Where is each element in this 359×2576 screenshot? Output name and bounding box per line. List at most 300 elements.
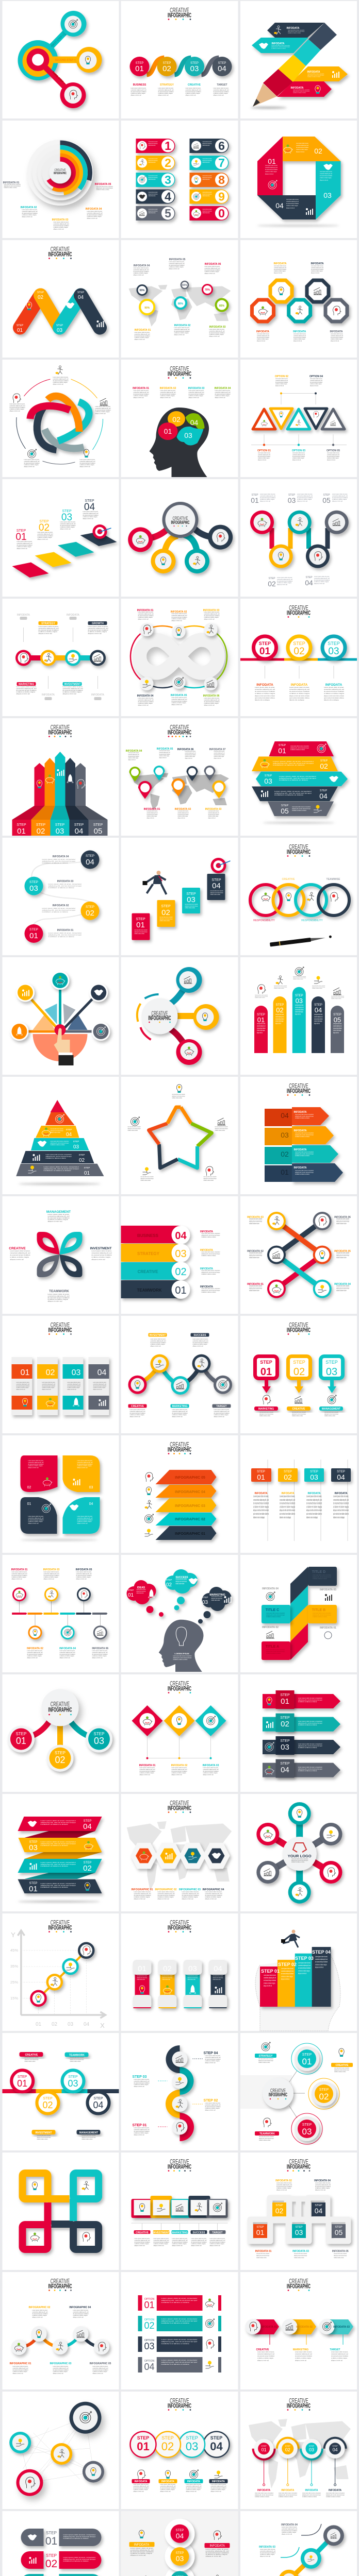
step numbers: STEP xyxy=(46,2553,57,2558)
pins xyxy=(255,1356,342,1393)
section text: 03 xyxy=(323,191,332,199)
title boxes xyxy=(262,1567,337,1660)
ring text: 02 xyxy=(293,646,305,657)
step numbers: STEP xyxy=(86,905,94,909)
ribbon numbers: 01 xyxy=(136,921,145,929)
bands xyxy=(252,741,348,816)
panel: square pins xyxy=(240,1316,357,1433)
pin text: INFODATA 04 xyxy=(126,750,142,753)
info blocks: INFODATA 03 xyxy=(188,387,205,390)
circles and numbers: 5 xyxy=(165,207,171,220)
ring numbers: 02 xyxy=(161,2440,174,2453)
band text: STEP xyxy=(84,1820,91,1823)
bar text: STEP 01 xyxy=(261,1969,280,1974)
nodes xyxy=(256,2525,344,2576)
title xyxy=(48,724,72,737)
step numbers: STEP xyxy=(86,854,94,858)
dotted map xyxy=(129,285,231,327)
ribbon numbers xyxy=(134,878,223,935)
bar text: STEP 02 xyxy=(278,1962,297,1967)
icon nodes xyxy=(60,11,102,108)
axes: Y xyxy=(11,1931,15,1939)
upper labels: INFOGRAPHIC 04 xyxy=(69,2306,91,2309)
title: CREATIVE xyxy=(170,1680,189,1688)
info blocks: INFODATA 01 xyxy=(3,181,20,184)
step text xyxy=(133,2052,221,2136)
panel: three circles: STEP xyxy=(15,1732,26,1736)
arrow text: INFODATA 03 xyxy=(333,2326,350,2329)
tab numbers: STEP xyxy=(257,1470,265,1473)
panel: hub with outlined circles: STEP xyxy=(302,2123,312,2127)
panel: world half discs: 02 xyxy=(285,2447,290,2452)
arrow labels: INFODATA xyxy=(271,42,285,45)
floor shadow xyxy=(21,1539,98,1540)
clouds xyxy=(127,1569,231,1624)
ring numbers xyxy=(17,2075,104,2110)
panel: cube arrows xyxy=(240,1077,357,1194)
ring numbers: STEP xyxy=(93,2097,103,2100)
panel: stairs xyxy=(2,479,119,597)
box text: TITLE D xyxy=(312,1570,325,1574)
info bottom: INFODATA 05 xyxy=(171,694,187,697)
panel: hub with outlined circles: 03 xyxy=(302,2127,312,2137)
band labels: 03 xyxy=(264,777,272,785)
info blocks: INFODATA 04 xyxy=(215,387,231,390)
pin numbers: STEP xyxy=(325,1360,338,1365)
tab numbers: STEP xyxy=(310,1470,318,1473)
arms xyxy=(268,1814,331,1892)
circles and numbers: 8 xyxy=(218,173,225,187)
ring numbers: 03 xyxy=(186,2440,198,2453)
centre title xyxy=(41,1689,78,1726)
side labels: INFODATA 06 xyxy=(334,1216,351,1219)
map xyxy=(132,773,229,810)
panel: timeline pins xyxy=(2,1555,119,1672)
title: INFOGRAPHIC xyxy=(287,849,311,856)
bottom labels: INFODATA xyxy=(293,330,306,333)
bottom labels xyxy=(255,2250,349,2259)
step numbers xyxy=(29,854,94,940)
panel: metaball title xyxy=(121,479,238,597)
ring numbers: 04 xyxy=(210,2440,223,2453)
ribbon numbers: 03 xyxy=(187,895,195,904)
tab text: 02 xyxy=(281,1720,289,1728)
axes: 02 xyxy=(52,2022,57,2027)
ring numbers: STEP xyxy=(18,2075,27,2079)
band labels: STEP xyxy=(279,744,286,747)
title: INFOGRAPHIC xyxy=(168,1686,191,1692)
step circles: STEP xyxy=(190,62,199,65)
bottom labels: INFODATA 04 xyxy=(59,1647,76,1650)
tab text: STEP xyxy=(280,1716,290,1720)
title: INFOGRAPHIC xyxy=(168,730,191,736)
stripe numbers: 04 xyxy=(175,1230,187,1242)
title xyxy=(287,2278,311,2291)
head silhouette xyxy=(150,408,209,477)
info blocks: INFODATA 04 xyxy=(134,264,150,267)
bottom tags: MANAGEMENT xyxy=(79,2131,98,2134)
info bottom xyxy=(137,694,220,706)
top options xyxy=(275,375,323,404)
lower tags: MARKETING xyxy=(258,1408,274,1411)
top tags xyxy=(149,1333,209,1347)
step circles: 01 xyxy=(135,64,144,73)
tab numbers: 02 xyxy=(284,1473,292,1481)
half pie xyxy=(33,1004,88,1061)
panel: world percentages: 85% xyxy=(219,304,225,308)
panel: cube arrows: INFODATA xyxy=(293,1129,307,1132)
panel: flower petals xyxy=(2,1196,119,1314)
band labels: STEP xyxy=(17,324,24,327)
bottom labels: INFODATA 05 xyxy=(332,2250,349,2253)
target xyxy=(210,858,230,873)
ring numbers: STEP xyxy=(137,2435,149,2441)
nodes xyxy=(11,2326,109,2355)
partial ring xyxy=(137,994,159,1040)
info bottom: INFODATA 04 xyxy=(137,694,154,698)
captions: INFOGRAPHIC 03 xyxy=(179,1888,201,1891)
ring numbers: 03 xyxy=(68,2078,78,2089)
triangles xyxy=(253,409,345,429)
ring numbers: STEP xyxy=(43,2097,53,2100)
panel: three circles xyxy=(2,1674,119,1792)
head with bulb xyxy=(159,1620,203,1672)
ring numbers: 04 xyxy=(93,2100,104,2110)
panel: world percentages: 90% xyxy=(144,307,150,310)
centre title xyxy=(141,998,177,1034)
panel: concentric arcs xyxy=(2,121,119,238)
pin numbers: STEP xyxy=(293,1360,305,1365)
step numbers: 02 xyxy=(39,522,50,533)
title xyxy=(168,1441,191,1454)
faint callouts: INFODATA xyxy=(42,693,55,697)
timeline xyxy=(251,434,347,461)
pointing hand xyxy=(54,1028,73,1065)
stems xyxy=(146,1736,211,1759)
runner xyxy=(281,1930,300,1947)
panel: arrows list xyxy=(121,1435,238,1553)
squares xyxy=(253,2202,346,2238)
chain xyxy=(15,650,106,666)
panel: octagon ribbon xyxy=(240,121,357,238)
option labels: 03 xyxy=(144,2341,155,2351)
ribbon numbers: STEP xyxy=(211,878,221,882)
panel: rings on line xyxy=(240,599,357,716)
panel: dot chain xyxy=(2,599,119,716)
ring numbers xyxy=(137,2435,223,2453)
pale backing xyxy=(240,2075,292,2109)
panel: cylinders xyxy=(121,1913,238,2031)
panel: world percentages: 55% xyxy=(139,289,145,292)
captions: TARGET xyxy=(217,83,227,87)
panel: zigzag frames: 05 xyxy=(335,2228,342,2236)
ribbon numbers: 02 xyxy=(161,908,170,917)
step circles: STEP xyxy=(136,62,143,65)
connectors xyxy=(140,520,220,561)
leaf text xyxy=(27,1460,93,1524)
title: INFOGRAPHIC xyxy=(287,1088,311,1095)
title: INFOGRAPHIC xyxy=(48,1925,72,1931)
band labels: STEP xyxy=(37,291,44,294)
left items: INFODATA xyxy=(134,2544,149,2547)
tags: INFODATA xyxy=(187,2480,200,2483)
top options: OPTION 02 xyxy=(275,375,288,378)
title: INFOGRAPHIC xyxy=(168,1447,191,1453)
timeline: OPTION 01 xyxy=(257,449,271,452)
bar labels: 03 xyxy=(296,997,303,1005)
title xyxy=(287,1082,311,1096)
panel: vertical circles on grey: 04 xyxy=(176,2532,184,2540)
title: INFOGRAPHIC xyxy=(287,2164,311,2171)
info columns: INFODATA xyxy=(291,683,308,687)
title: CREATIVE xyxy=(170,7,189,14)
bottom steps xyxy=(268,575,330,588)
panel: step tabs xyxy=(2,2511,119,2576)
side items: INFODATA 02 xyxy=(262,1626,279,1629)
icons xyxy=(31,2181,91,2242)
panel: hub with outlined circles: 01 xyxy=(302,2057,312,2066)
title: INFOGRAPHIC xyxy=(168,2403,191,2410)
panel: triangles timeline xyxy=(240,360,357,477)
rings xyxy=(27,140,93,206)
bottom steps: 04 xyxy=(305,579,313,587)
arrow icons xyxy=(37,769,85,789)
icons xyxy=(259,287,341,315)
rings xyxy=(254,636,345,659)
step circles: STEP xyxy=(163,62,171,65)
title: CREATIVE xyxy=(289,604,308,612)
step numbers: STEP xyxy=(62,510,72,513)
panel: overlapping step rings xyxy=(121,2392,238,2509)
stripe circles xyxy=(171,1226,190,1299)
pin text xyxy=(126,748,226,819)
side labels: INFODATA 03 xyxy=(247,1216,264,1219)
option labels: 02 xyxy=(144,2320,155,2331)
step numbers: STEP xyxy=(85,499,94,503)
lower tags xyxy=(254,1395,343,1417)
band text: STEP xyxy=(29,1841,37,1844)
panel: vertical circles on grey xyxy=(121,2511,238,2576)
bar labels: STEP xyxy=(314,1004,322,1007)
top steps: 05 xyxy=(322,496,331,504)
lobe numbers xyxy=(164,415,198,439)
tab text xyxy=(253,1492,349,1519)
axes: 01 xyxy=(36,2022,41,2027)
step circles: 04 xyxy=(218,64,226,73)
title: INFOGRAPHIC xyxy=(287,2283,311,2290)
step numbers: STEP xyxy=(46,2531,57,2535)
faint callouts: INFODATA xyxy=(67,614,79,617)
panel: world half discs xyxy=(240,2392,357,2509)
panel: option rows xyxy=(121,2272,238,2389)
arrows xyxy=(34,752,86,806)
nodes xyxy=(128,502,233,573)
rings xyxy=(250,885,349,916)
folded centre xyxy=(290,1567,308,1660)
diamonds xyxy=(132,1705,226,1736)
step discs xyxy=(8,1726,112,1772)
title xyxy=(168,1919,191,1933)
mesh lines xyxy=(21,2417,94,2483)
panel: ribbon star xyxy=(121,1077,238,1194)
title: INFOGRAPHIC xyxy=(48,730,72,736)
panel: three circles: 03 xyxy=(94,1736,104,1746)
leaf text: 04 xyxy=(89,1502,93,1506)
panel: ribbon arrows xyxy=(240,1674,357,1792)
stripe text: INFODATA xyxy=(200,1267,213,1270)
tab numbers: STEP xyxy=(337,1470,345,1473)
title xyxy=(287,2158,311,2172)
connectors xyxy=(21,1718,99,1758)
circles and numbers: 6 xyxy=(218,139,225,152)
panel: octagon row xyxy=(240,240,357,358)
panel: stripes xyxy=(121,1196,238,1314)
knot frames xyxy=(23,2173,99,2249)
hub: INFOGRAPHIC xyxy=(269,2092,287,2098)
links xyxy=(289,2071,305,2118)
band labels: STEP xyxy=(320,789,328,792)
option labels: OPTION xyxy=(144,2298,154,2301)
panel: rings with stripe xyxy=(2,2033,119,2150)
panel: world pins xyxy=(121,718,238,836)
title: INFOGRAPHIC xyxy=(168,371,191,378)
panel: numbered pills xyxy=(121,121,238,238)
data points xyxy=(31,1943,93,2006)
top steps: STEP xyxy=(251,494,258,497)
column bands xyxy=(11,1364,109,1410)
curved captions: CREATIVE xyxy=(282,878,295,881)
option labels xyxy=(144,2298,155,2372)
branch labels: THIRD STEP > xyxy=(51,71,66,85)
stripe numbers: 03 xyxy=(175,1248,187,1260)
title: CREATIVE xyxy=(170,1441,189,1449)
small icons xyxy=(139,143,200,216)
arrow labels: INFODATA xyxy=(307,71,320,74)
timeline: OPTION 05 xyxy=(327,449,340,452)
circles and numbers: 0 xyxy=(218,207,225,220)
step numbers: 04 xyxy=(86,858,94,867)
petal captions: MANAGEMENT xyxy=(46,1210,71,1214)
bar labels: STEP xyxy=(333,1013,341,1016)
tab text: INFODATA xyxy=(307,1492,321,1495)
info top: INFODATA 03 xyxy=(203,609,220,612)
section text xyxy=(265,142,333,215)
arrow text: INFOGRAPHIC 04 xyxy=(175,1490,205,1494)
side items: INFODATA 03 xyxy=(320,1588,336,1591)
band labels xyxy=(17,291,104,333)
option labels: OPTION xyxy=(144,2360,154,2363)
head outline xyxy=(255,1955,340,2031)
info blocks: INFODATA 02 xyxy=(21,206,37,209)
circles and numbers: 3 xyxy=(165,173,171,187)
arrows xyxy=(156,1470,217,1540)
title xyxy=(168,365,191,379)
lower tags: CREATIVE xyxy=(292,1408,305,1411)
side labels: INFODATA 04 xyxy=(334,1283,351,1286)
centre title: CREATIVE xyxy=(173,516,188,521)
ring numbers: STEP xyxy=(186,2435,198,2441)
icon nodes xyxy=(140,623,218,690)
petals xyxy=(37,1232,83,1277)
band labels: 04 xyxy=(319,792,328,800)
option labels: 04 xyxy=(144,2362,155,2372)
step numbers: 01 xyxy=(15,532,27,543)
section text: 04 xyxy=(275,201,284,210)
step numbers: 01 xyxy=(45,2535,57,2547)
logo centre xyxy=(283,1837,317,1871)
panel: zigzag frames: STEP xyxy=(256,2226,264,2229)
title: INFOGRAPHIC xyxy=(48,1327,72,1334)
info top: INFODATA 01 xyxy=(137,609,154,612)
rings xyxy=(11,2070,109,2113)
info blocks: INFODATA 05 xyxy=(169,258,186,261)
diagonal links xyxy=(266,2535,334,2576)
bar labels: 04 xyxy=(315,1006,322,1014)
hexagons xyxy=(130,1843,230,1869)
panel: world half discs: STEP xyxy=(332,2445,338,2447)
curved captions: TEAMWISE xyxy=(327,878,340,881)
panel: ribbon list xyxy=(2,1794,119,1911)
colour bars xyxy=(138,2295,221,2372)
arrows xyxy=(292,1107,343,1182)
step numbers xyxy=(45,2531,57,2576)
tags: INFODATA xyxy=(161,2480,174,2483)
panel: vertical circles on grey: STEP xyxy=(176,2529,184,2532)
panel: hub with outlined circles: 02 xyxy=(319,2092,329,2102)
stems xyxy=(263,2456,336,2486)
tab numbers: 04 xyxy=(337,1473,345,1481)
centre title xyxy=(171,516,190,527)
top labels: INFODATA 01 xyxy=(11,1568,28,1571)
panel: diagonal arrows xyxy=(240,2511,357,2576)
circles and numbers: 4 xyxy=(165,190,171,203)
step labels: STEP xyxy=(74,823,84,827)
bottom tags: TARGET xyxy=(216,1405,227,1408)
floor shadow xyxy=(263,822,335,823)
lobe numbers: 01 xyxy=(164,427,172,435)
band labels xyxy=(264,744,328,815)
ring numbers: STEP xyxy=(161,2435,174,2441)
map xyxy=(249,2419,351,2488)
step labels xyxy=(17,823,103,836)
callout text: INFODATA 04 xyxy=(281,2523,298,2527)
right bars xyxy=(59,2529,101,2576)
arrow text: INFOGRAPHIC 01 xyxy=(175,1532,205,1536)
circles and numbers: 2 xyxy=(165,156,171,170)
ribbon numbers: STEP xyxy=(186,892,196,896)
step numbers: STEP xyxy=(17,529,26,533)
lower tags: MANAGEMENT xyxy=(322,1408,340,1411)
bar text xyxy=(261,1950,331,1987)
map xyxy=(127,1821,232,1891)
stripes xyxy=(121,1226,181,1298)
step text: INFODATA 01 xyxy=(57,929,74,932)
top labels: INFODATA xyxy=(311,262,324,265)
circles and numbers xyxy=(137,139,228,220)
step numbers: STEP xyxy=(29,928,38,931)
axes: 25% xyxy=(10,1980,18,1985)
panel: cube arrows: INFODATA xyxy=(293,1148,307,1151)
tab text: INFODATA xyxy=(281,1492,295,1495)
lower labels: INFOGRAPHIC 05 xyxy=(90,2362,111,2365)
band icons xyxy=(260,744,338,812)
left caps xyxy=(21,2529,43,2576)
curved captions xyxy=(253,878,340,922)
title: CREATIVE xyxy=(51,1919,70,1927)
captions xyxy=(132,1888,224,1900)
panel: zigzag frames: 03 xyxy=(295,2228,303,2236)
ribbon numbers: STEP xyxy=(136,918,145,921)
